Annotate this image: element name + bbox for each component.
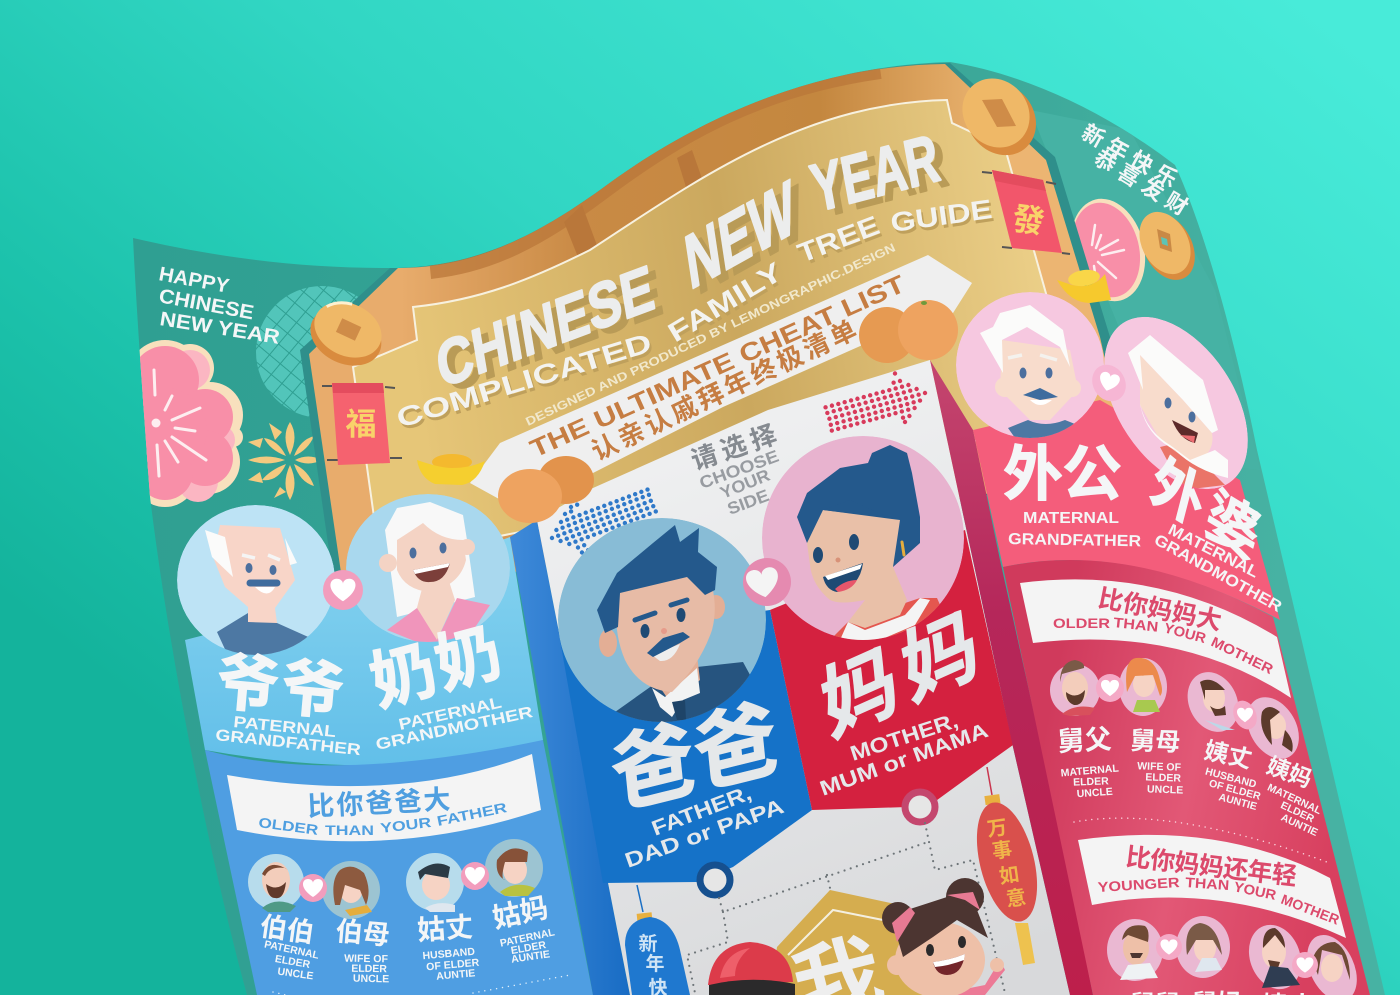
english line: YOUR — [1162, 619, 1208, 646]
title shadow: CHINESE — [440, 257, 667, 407]
icon: fu scroll — [322, 383, 402, 465]
text: happy chinese new year: HAPPY — [157, 263, 232, 298]
hair — [797, 445, 920, 567]
text: mother's sibling labels: ELDER — [1145, 771, 1182, 785]
arrow: blue dots left — [552, 489, 657, 552]
english line: THAN — [325, 822, 374, 838]
label: paternal grandmother: GRANDMOTHER — [374, 704, 535, 754]
title — [438, 136, 950, 389]
hair — [1128, 335, 1218, 433]
icon: blue lantern: 新 — [638, 933, 658, 955]
icon: hearts — [1096, 674, 1261, 733]
text: mother's sibling names: 舅父 — [1057, 724, 1112, 757]
text: mother's sibling names: 姨妈 — [1263, 752, 1315, 792]
panel: white ribbon — [470, 255, 972, 505]
text: ba ba: 爸爸 — [607, 690, 782, 826]
panel: pink grandparents band — [973, 400, 1280, 620]
label: mother — [817, 709, 991, 801]
shirt — [217, 613, 315, 660]
body — [828, 598, 960, 650]
icon: right gold ingot — [1057, 268, 1111, 303]
english line: OLDER — [1053, 615, 1110, 631]
icon: right coin — [1140, 212, 1195, 280]
label: maternal grandmother: GRANDMOTHER — [1151, 532, 1285, 616]
text: mother's sibling labels: MATERNAL — [1265, 782, 1324, 817]
text: father's sibling labels: UNCLE — [353, 973, 389, 985]
credit line: DESIGNED AND PRODUCED BY LEMONGRAPHIC.DESIGN — [523, 240, 898, 429]
icon: heart badge right — [1086, 359, 1132, 407]
english line — [1053, 614, 1276, 677]
label: paternal grandfather — [215, 714, 362, 759]
icon: red ring — [905, 792, 935, 822]
icon: left coin — [310, 301, 382, 366]
icon: hearts — [1156, 934, 1318, 978]
text: mother's sibling labels: MATERNAL — [1060, 762, 1120, 780]
divider right — [1074, 818, 1327, 862]
icon: heart badge centre — [743, 558, 791, 606]
title letters: CHINESE — [432, 252, 659, 402]
english line: MOTHER — [1209, 633, 1276, 677]
banner: younger than your mother: 比你妈妈还年轻 — [1124, 843, 1298, 891]
panel: red older column — [1003, 560, 1370, 995]
text: mother's sibling labels: ELDER — [1279, 799, 1316, 825]
ears — [599, 629, 617, 657]
row: mother's younger siblings faces — [1107, 916, 1367, 995]
text: ma ma: 妈妈 — [815, 598, 986, 754]
label: maternal grandmother: MATERNAL — [1165, 521, 1261, 582]
text: father's sibling labels: HUSBAND — [422, 946, 476, 962]
banner: younger than your mother — [1078, 835, 1346, 938]
label: maternal grandfather: MATERNAL — [1023, 510, 1119, 527]
pattern circle: lattice — [256, 286, 358, 416]
icon: heart badge left — [323, 570, 363, 610]
hair — [205, 530, 233, 577]
label: mother: MUM or MAMA — [817, 719, 991, 801]
label: father: DAD or PAPA — [622, 795, 787, 873]
text: father's sibling labels: PATERNAL — [499, 926, 556, 950]
text: happy chinese new year: CHINESE — [157, 285, 255, 324]
title letters: NEW — [680, 163, 800, 306]
subtitle shadow: GUIDE — [891, 197, 996, 241]
ribbon text: THE ULTIMATE CHEAT LIST — [526, 270, 909, 463]
label: father: FATHER, — [649, 782, 755, 841]
face — [1140, 355, 1212, 462]
portrait: paternal grandmother — [346, 494, 510, 650]
text: ye ye: 爷爷 — [214, 648, 346, 728]
subtitle letters — [393, 194, 994, 434]
text: mother's sibling labels: ELDER — [1073, 775, 1109, 789]
label: maternal grandfather: GRANDFATHER — [1008, 531, 1142, 550]
text: mother's sibling names: 姨丈 — [1202, 737, 1254, 774]
english line: MOTHER — [1279, 891, 1342, 928]
text: father's sibling labels: PATERNAL — [263, 938, 321, 962]
text: father's sibling labels: OF ELDER — [426, 957, 480, 973]
text: father's sibling labels: UNCLE — [277, 966, 314, 982]
face — [616, 565, 715, 692]
text: father's sibling names — [258, 892, 551, 951]
text: wai gong: 外公 — [1003, 441, 1122, 508]
text: happy chinese new year — [159, 266, 279, 344]
icon: blue lantern: 年 — [645, 952, 665, 975]
label: mother: MOTHER, — [847, 709, 961, 766]
panel: blue older column — [205, 740, 593, 995]
subtitle letters: TREE — [793, 210, 884, 269]
ribbon text: 认亲认戚拜年终极清单 — [587, 314, 861, 466]
face and neck — [807, 510, 907, 628]
portrait: maternal grandfather — [956, 292, 1104, 445]
family tree dotted lines — [687, 823, 1005, 993]
hair — [597, 525, 717, 633]
label: paternal grandfather: GRANDFATHER — [215, 727, 362, 759]
icon: pink flower right — [1074, 198, 1146, 302]
text: mother's sibling labels: AUNTIE — [1279, 812, 1320, 839]
text: choose your side: CHOOSE — [697, 447, 781, 493]
panel: dad blue — [560, 610, 812, 883]
label: paternal grandfather: PATERNAL — [233, 714, 337, 741]
banner: older than your mother — [1020, 579, 1291, 698]
icon: red lantern — [966, 767, 1048, 965]
suit — [600, 662, 780, 730]
head — [213, 525, 295, 623]
features — [813, 547, 823, 563]
text: mother's sibling names — [1057, 724, 1315, 792]
panel: light blue grandparents band — [185, 537, 543, 765]
row: mother's older siblings faces — [1050, 658, 1309, 768]
text: mother's sibling names: 舅母 — [1130, 727, 1181, 757]
text: father's sibling labels: ELDER — [510, 939, 547, 957]
panel: mum red — [770, 530, 1013, 810]
text: mother's sibling labels: WIFE OF — [1137, 760, 1182, 774]
title shadow: NEW — [688, 168, 808, 311]
icon: fa scroll — [982, 170, 1070, 254]
text: mother's sibling labels: UNCLE — [1147, 783, 1183, 797]
english line — [1097, 874, 1342, 928]
text: father's sibling labels: AUNTIE — [510, 948, 551, 966]
label: father — [622, 782, 787, 873]
pattern: waves top right — [1034, 111, 1132, 186]
english line: THAN — [1185, 874, 1230, 893]
text: choose your side: 请选择 — [687, 419, 780, 476]
icon: right oranges — [859, 300, 958, 363]
text: father's sibling labels: ELDER — [274, 953, 311, 971]
row: father's older siblings faces — [248, 839, 543, 919]
shirt — [1160, 443, 1225, 490]
panel: centre white — [537, 360, 1070, 995]
subtitle shadow — [395, 197, 996, 437]
english line — [258, 799, 508, 838]
icon: left gold ingot — [417, 454, 485, 485]
text: mother's sibling labels: OF ELDER — [1208, 777, 1262, 803]
portrait: mother — [762, 436, 964, 650]
text: father's sibling labels — [263, 926, 556, 985]
icon: red lantern: 万 — [986, 817, 1009, 841]
icon: red lantern: 如 — [998, 863, 1021, 888]
divider left — [273, 975, 570, 995]
text: father's sibling labels: WIFE OF — [344, 953, 389, 965]
panel: blue fold — [510, 520, 630, 995]
portrait: boy — [708, 942, 795, 995]
ribbon text — [526, 270, 909, 466]
icon: hearts — [299, 862, 489, 902]
icon: pink flower left — [140, 340, 243, 507]
title letters: YEAR — [805, 121, 945, 227]
neck — [655, 655, 700, 705]
text: choose your side — [690, 423, 780, 514]
english line: YOUNGER — [1097, 874, 1180, 895]
portrait: maternal grandmother — [1074, 291, 1278, 515]
subtitle shadow: COMPLICATED — [395, 331, 657, 437]
text: father's sibling names: 伯伯 — [258, 911, 316, 948]
english line: FATHER — [435, 799, 508, 829]
text: mother's sibling labels: HUSBAND — [1204, 766, 1258, 791]
icon: blue ring — [700, 865, 730, 895]
text: younger siblings names — [1130, 990, 1312, 995]
head — [379, 554, 397, 572]
portrait: girl — [882, 878, 1005, 995]
title shadow — [446, 141, 950, 389]
english line: YOUR — [379, 814, 432, 836]
banner: older than your mother: 比你妈妈大 — [1096, 584, 1224, 636]
text: chinese greeting: 新年快乐 — [1078, 120, 1182, 192]
english line: THAN — [1113, 614, 1159, 635]
english line: OLDER — [258, 814, 319, 838]
icon: fa scroll: 發 — [1010, 200, 1047, 240]
panel: header tan frame — [300, 63, 1140, 600]
portrait: paternal grandfather — [177, 505, 335, 660]
text: choose your side: SIDE — [725, 486, 772, 519]
text: happy chinese new year: NEW YEAR — [158, 308, 282, 349]
text: choose your side: YOUR — [717, 466, 773, 503]
icon: gold house with wo — [770, 890, 960, 995]
subtitle letters: FAMILY — [663, 257, 788, 348]
text: father's sibling names: 姑妈 — [490, 892, 551, 934]
text: father's sibling names: 姑丈 — [416, 911, 474, 946]
face — [246, 563, 252, 573]
body — [387, 598, 490, 650]
icon: top coin — [962, 78, 1036, 156]
banner: older than your father — [227, 754, 541, 841]
text: wai po: 外婆 — [1145, 447, 1266, 572]
features — [640, 624, 650, 638]
icon: fu scroll: 福 — [346, 407, 376, 442]
subtitle shadow: TREE — [795, 213, 886, 272]
collar and tie — [652, 668, 700, 717]
title shadow: YEAR — [813, 126, 953, 232]
text: chinese greeting — [1081, 123, 1189, 216]
panel: red fold — [930, 360, 1093, 995]
text: father's sibling names: 伯母 — [334, 916, 391, 951]
icon: left oranges — [498, 456, 594, 523]
subtitle shadow: FAMILY — [665, 260, 790, 351]
text: chinese greeting: 恭喜发财 — [1089, 145, 1192, 220]
arrow: red dots right — [825, 374, 925, 431]
label: maternal grandfather — [1008, 510, 1142, 550]
text: mother's sibling labels — [1060, 760, 1324, 839]
icon: red lantern: 意 — [1004, 885, 1028, 911]
subtitle — [393, 194, 996, 437]
portrait: father — [558, 518, 780, 730]
text: father's sibling labels: AUNTIE — [436, 967, 476, 983]
text: father's sibling labels: ELDER — [351, 963, 387, 975]
title letters — [438, 136, 942, 384]
text: mother's sibling labels: UNCLE — [1076, 786, 1113, 800]
subtitle letters: COMPLICATED — [393, 328, 655, 434]
text: nai nai: 奶奶 — [363, 615, 509, 720]
hair — [385, 502, 475, 617]
beard — [1140, 403, 1228, 478]
panel: header gold inner — [353, 100, 1080, 560]
icon: red lantern: 事 — [991, 838, 1014, 863]
icon: blue lantern — [625, 885, 690, 995]
banner: older than your father: 比你爸爸大 — [307, 785, 451, 822]
english line: YOUR — [1232, 878, 1278, 903]
icon: gold mandala — [248, 422, 322, 500]
text: mother's sibling labels: AUNTIE — [1217, 791, 1258, 813]
label: paternal grandmother: PATERNAL — [397, 695, 504, 734]
subtitle letters: GUIDE — [889, 194, 994, 238]
label: paternal grandmother — [374, 695, 535, 754]
